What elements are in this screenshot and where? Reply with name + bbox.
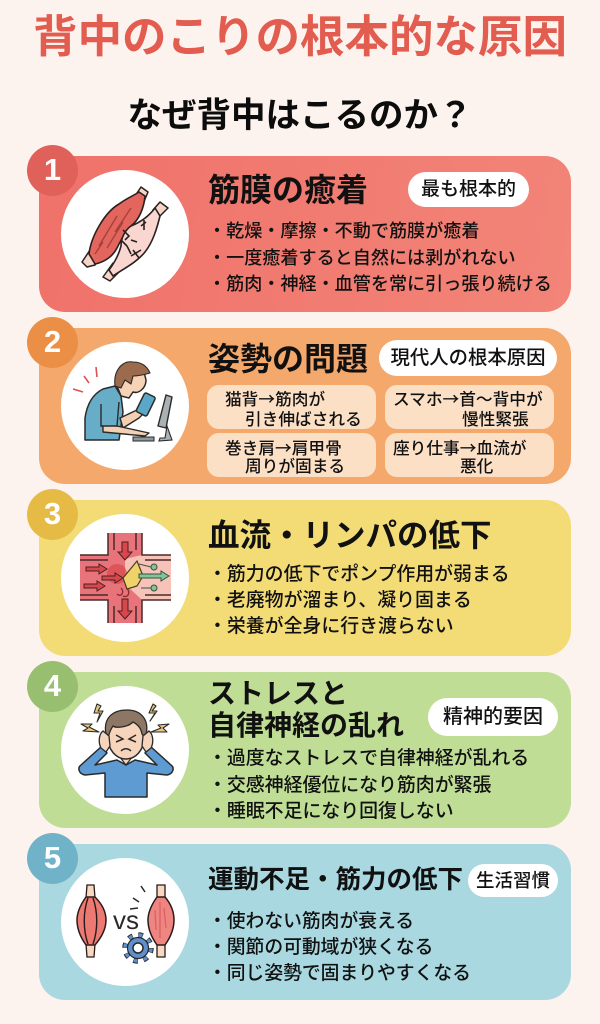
bullet list: ・一度癒着すると自然には剥がれない: [208, 248, 516, 268]
box: slouching: 引き伸ばされる: [245, 406, 362, 430]
number badge 2: [27, 317, 78, 368]
box: slouching: [207, 385, 376, 429]
tag: lifestyle: 生活習慣: [476, 870, 550, 891]
heading: 姿勢の問題: [208, 341, 368, 377]
subtitle: なぜ背中はこるのか？: [128, 97, 472, 135]
number badge 2: 2: [44, 324, 61, 359]
box: smartphone neck: [385, 385, 554, 429]
bullet list: ・使わない筋肉が衰える: [208, 910, 414, 931]
tag: most fundamental: [408, 172, 529, 207]
icon: muscles versus with gear: [61, 858, 189, 986]
box: desk work: 座り仕事→血流が: [393, 435, 526, 459]
panel: 4 stress: [27, 661, 571, 828]
bullet list: ・睡眠不足になり回復しない: [208, 801, 454, 822]
card background 5: [39, 844, 571, 1000]
number badge 4: [27, 661, 78, 712]
number badge 1: [27, 145, 78, 196]
icon: torn muscle fascia: [61, 170, 189, 298]
heading: 血流・リンパの低下: [208, 517, 492, 553]
bullet list: ・過度なストレスで自律神経が乱れる: [208, 748, 529, 769]
number badge 4: 4: [44, 668, 61, 703]
number badge 5: 5: [44, 840, 61, 875]
bullet list: [208, 910, 471, 983]
icon: stressed man holding head: [61, 686, 189, 814]
bullet list: ・筋肉・神経・血管を常に引っ張り続ける: [208, 274, 552, 294]
number badge 5: [27, 833, 78, 884]
title: 背中のこりの根本的な原因: [33, 13, 567, 62]
card background 4: [39, 672, 571, 828]
bullet list: [208, 748, 529, 822]
tag: mental factor: 精神的要因: [443, 706, 543, 728]
box: smartphone neck: スマホ→首～背中が: [393, 386, 543, 410]
panel: 1 fascia adhesion: [27, 145, 571, 312]
box: smartphone neck: 慢性緊張: [462, 406, 529, 430]
bullet list: ・老廃物が溜まり、凝り固まる: [208, 590, 472, 611]
card background 2: [39, 328, 571, 484]
box: rounded shoulders: 巻き肩→肩甲骨: [225, 435, 342, 459]
tag: lifestyle: [468, 864, 558, 897]
box: slouching: 猫背→筋肉が: [225, 386, 325, 410]
card background 3: [39, 500, 571, 656]
bullet list: ・同じ姿勢で固まりやすくなる: [208, 962, 471, 983]
card background 1: [39, 156, 571, 312]
heading: 筋膜の癒着: [208, 172, 368, 208]
panel: 5 lack of exercise: [27, 833, 571, 1000]
tag: modern root cause: [379, 340, 557, 376]
panel: 2 posture: [27, 317, 571, 484]
bullet list: ・乾燥・摩擦・不動で筋膜が癒着: [208, 221, 479, 241]
bullet list: ・筋力の低下でポンプ作用が弱まる: [208, 564, 510, 585]
box: desk work: [385, 433, 554, 477]
icon: muscles versus with gear: vs: [113, 905, 139, 935]
bullet list: [208, 564, 510, 637]
box: rounded shoulders: 周りが固まる: [245, 453, 345, 477]
tag: most fundamental: 最も根本的: [421, 179, 516, 200]
icon: blocked vessel crossing: [61, 514, 189, 642]
panel: 3 blood and lymph flow: [27, 489, 571, 656]
heading: ストレスと: [208, 678, 348, 709]
number badge 3: 3: [44, 496, 61, 531]
bullet list: [208, 221, 552, 294]
number badge 1: 1: [44, 152, 61, 187]
box: desk work: 悪化: [460, 453, 493, 477]
icon: hunched man with phone: [61, 342, 189, 470]
tag: mental factor: [428, 698, 558, 736]
bullet list: ・栄養が全身に行き渡らない: [208, 616, 454, 637]
heading: 運動不足・筋力の低下: [208, 866, 463, 894]
box: rounded shoulders: [207, 433, 376, 477]
heading line 2: 自律神経の乱れ: [208, 710, 404, 741]
bullet list: ・交感神経優位になり筋肉が緊張: [208, 774, 491, 796]
bullet list: ・関節の可動域が狭くなる: [208, 936, 433, 957]
tag: modern root cause: 現代人の根本原因: [390, 347, 546, 369]
number badge 3: [27, 489, 78, 540]
